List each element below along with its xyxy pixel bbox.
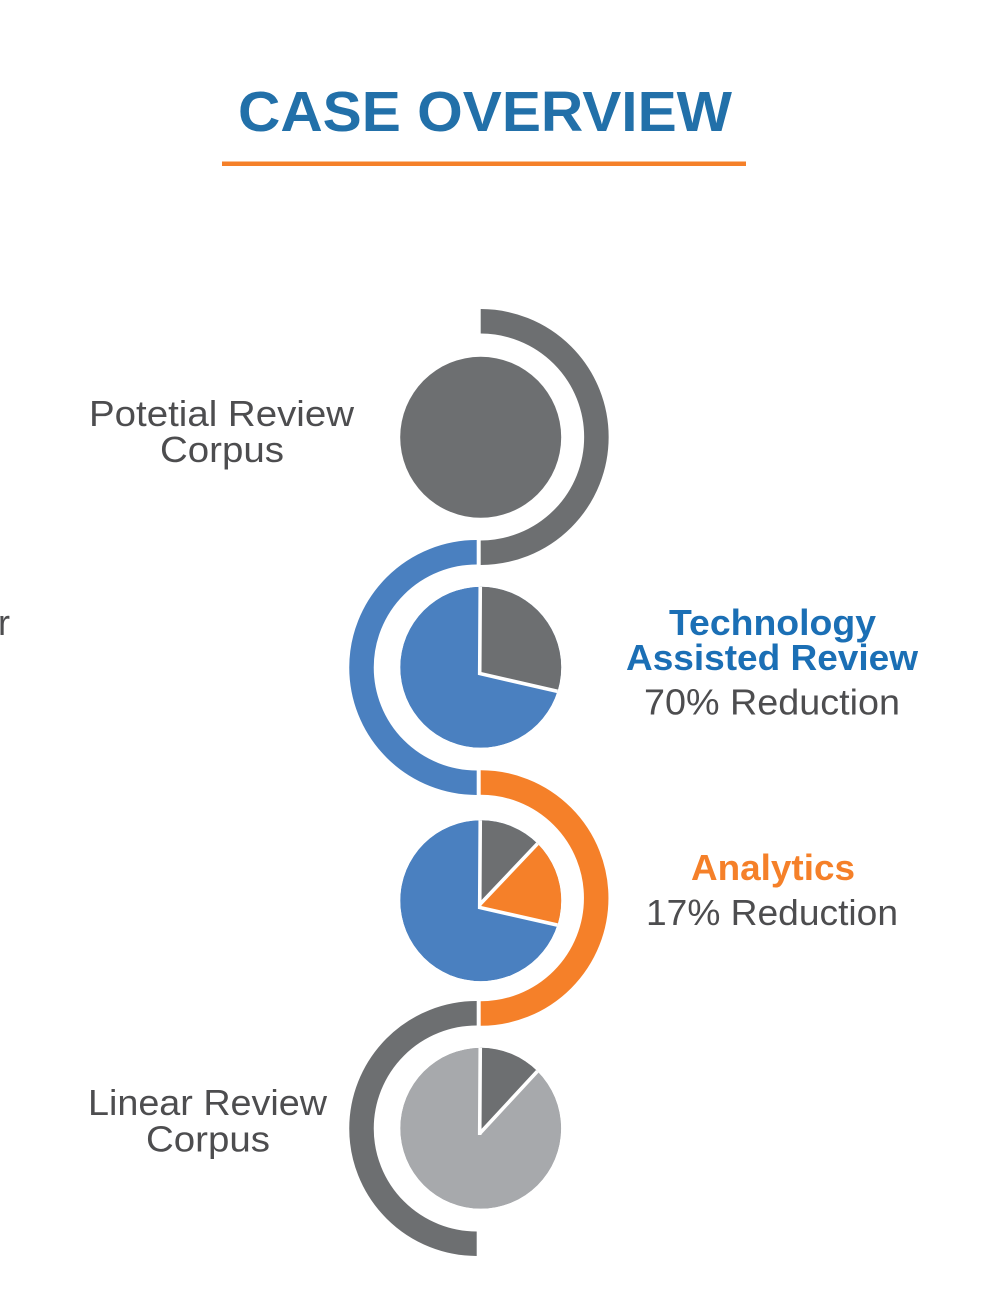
label: technology assisted review: Assisted Review — [626, 637, 919, 678]
label: potential review corpus — [89, 393, 355, 470]
pie: analytics — [400, 820, 562, 982]
title underline — [222, 162, 746, 166]
label: linear review corpus: Corpus — [146, 1118, 270, 1160]
label: technology assisted review — [626, 602, 919, 722]
label: linear review corpus — [88, 1082, 328, 1160]
label: analytics — [646, 847, 898, 933]
label: potential review corpus: Corpus — [160, 429, 284, 470]
label: potential review corpus: Potetial Review — [89, 393, 355, 434]
pie: potential review corpus — [400, 357, 561, 518]
arc: potential review corpus — [481, 321, 596, 553]
title: CASE OVERVIEW — [238, 80, 732, 144]
label: linear review corpus: Linear Review — [88, 1082, 328, 1123]
label: technology assisted review: Technology — [669, 602, 876, 643]
arc: linear review corpus — [362, 1013, 477, 1244]
pie: linear review corpus — [400, 1040, 561, 1209]
arc: technology assisted review — [362, 552, 477, 783]
label: technology assisted review: 70% Reduction — [644, 682, 900, 722]
label: analytics: Analytics — [691, 847, 855, 888]
pie: technology assisted review — [400, 580, 570, 748]
label: analytics: 17% Reduction — [646, 892, 898, 933]
arc: analytics — [481, 782, 596, 1014]
